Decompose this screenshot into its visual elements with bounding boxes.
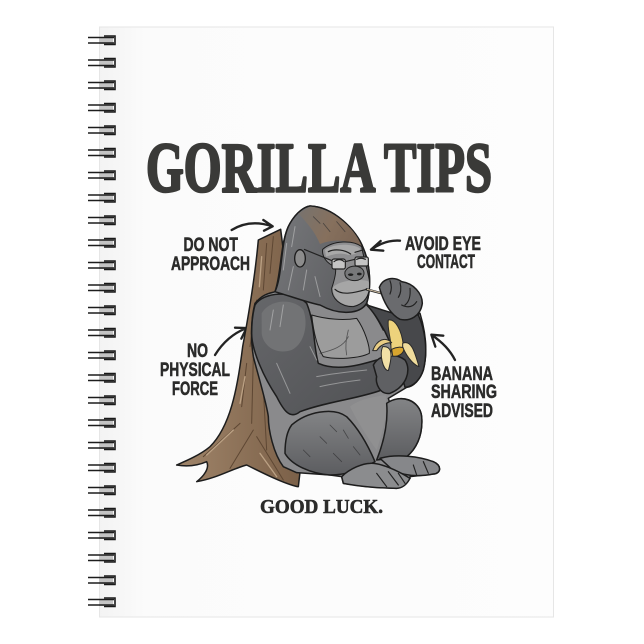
chest (312, 315, 369, 358)
gorilla body silhouette (252, 206, 440, 488)
label: no physical force: FORCE (172, 378, 218, 400)
far leg (377, 399, 422, 460)
raised forearm (367, 305, 426, 387)
label: banana sharing advised: SHARING (431, 381, 497, 403)
nose (345, 266, 364, 281)
near thigh (285, 411, 375, 475)
label: do not approach (171, 234, 250, 275)
toes (377, 462, 428, 487)
belly (350, 395, 386, 450)
label: no physical force: PHYSICAL (160, 359, 230, 381)
brow (325, 245, 360, 257)
spiral binding (88, 36, 115, 606)
arrow: banana sharing (431, 335, 455, 360)
head (275, 206, 370, 312)
label: banana sharing advised: ADVISED (431, 400, 493, 422)
ear (295, 250, 305, 267)
near arm (252, 294, 382, 415)
twig (367, 289, 400, 298)
arrow: avoid eye contact (371, 241, 400, 251)
illustration: gorilla and tree (177, 206, 455, 488)
label: no physical force (160, 340, 230, 400)
hand holding banana (373, 355, 408, 393)
eyes (328, 250, 365, 262)
label: do not approach: DO NOT (184, 234, 238, 256)
label: banana sharing advised: BANANA (431, 363, 493, 385)
mouth (335, 289, 367, 293)
label: avoid eye contact: CONTACT (417, 251, 475, 273)
banana (373, 320, 419, 371)
brown crest (298, 207, 362, 247)
label: avoid eye contact (405, 233, 481, 273)
raised fist (379, 279, 422, 320)
glasses (304, 249, 368, 269)
far foot (380, 456, 440, 476)
label: do not approach: APPROACH (171, 253, 250, 275)
muzzle (333, 280, 369, 306)
near foot (342, 463, 410, 488)
tree trunk (177, 229, 303, 487)
face (323, 242, 370, 307)
label: banana sharing advised (431, 363, 497, 422)
arrow: no physical force (215, 328, 247, 355)
label: no physical force: NO (187, 340, 208, 362)
footer text: GOOD LUCK. (260, 496, 383, 518)
notebook page (100, 27, 554, 617)
title: GORILLA TIPS (146, 130, 492, 208)
arrow: do not approach (232, 220, 273, 231)
thigh fur (303, 425, 360, 462)
label: avoid eye contact: AVOID EYE (405, 233, 481, 255)
